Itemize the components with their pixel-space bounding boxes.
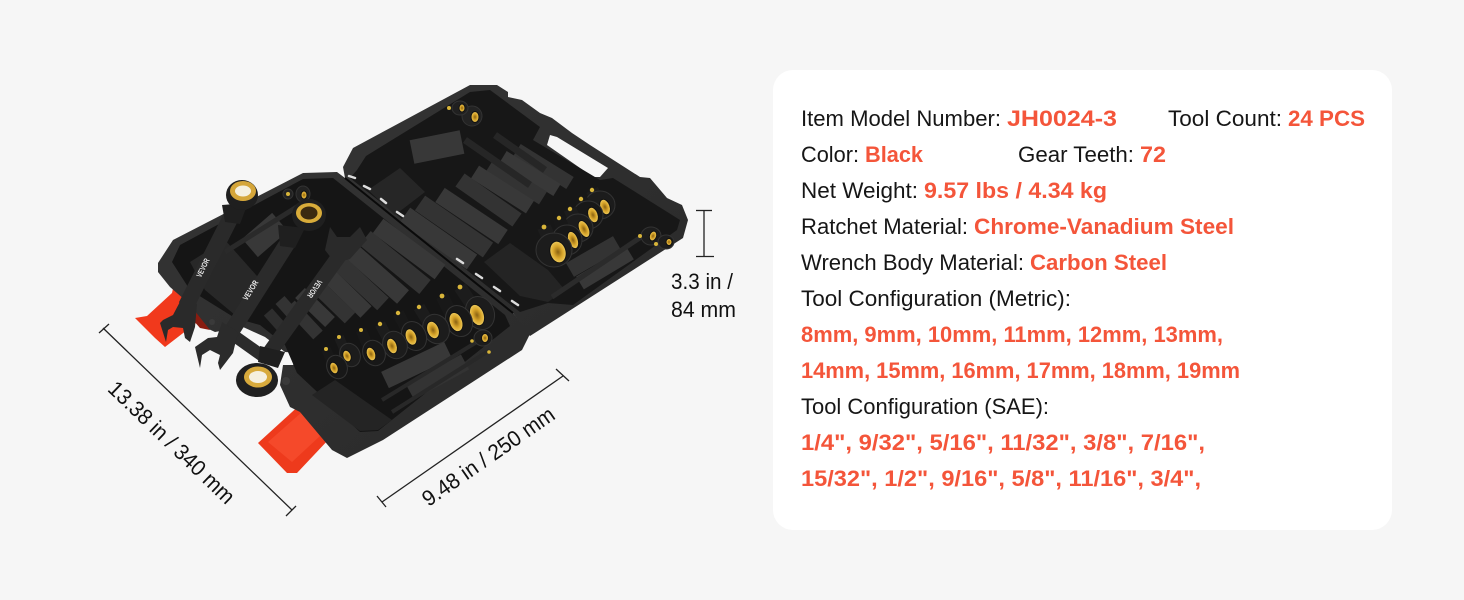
wrench two [195, 199, 326, 370]
net weight: Net Weight: [801, 178, 918, 203]
case lower half [158, 172, 530, 458]
upper compartment floor [484, 243, 565, 302]
color: Color: [801, 142, 859, 167]
SAE sizes [801, 430, 1205, 491]
lower wrench handles [225, 205, 490, 412]
wrench three [236, 227, 367, 397]
tool case product illustration [135, 85, 688, 473]
lower half cavity [172, 178, 510, 432]
net weight: 9.57 lbs / 4.34 kg [924, 178, 1107, 203]
upper half cavity [350, 90, 680, 312]
case upper half [343, 85, 688, 336]
metric sizes: 8mm, 9mm, 10mm, 11mm, 12mm, 13mm, [801, 322, 1223, 347]
red latch left [135, 280, 200, 347]
item model number [801, 106, 1117, 131]
tool count [1168, 106, 1365, 131]
hinge marks [349, 176, 518, 305]
specification text block [801, 106, 1365, 491]
wrench two: VEVOR [241, 278, 260, 302]
wrench body material [801, 250, 1167, 275]
color: Black [865, 142, 924, 167]
wrench body material: Wrench Body Material: [801, 250, 1024, 275]
metric heading: Tool Configuration (Metric): [801, 286, 1071, 311]
dimension: height: 84 mm [671, 297, 736, 322]
tool count: Tool Count: [1168, 106, 1282, 131]
item model number: Item Model Number: [801, 106, 1001, 131]
color [801, 142, 924, 167]
ratchet material: Chrome-Vanadium Steel [974, 214, 1234, 239]
dimension: width: 9.48 in / 250 mm [417, 402, 559, 511]
wrench one: VEVOR [195, 257, 212, 279]
lower ratchet heads [283, 186, 500, 382]
upper ratchet heads [447, 101, 674, 267]
SAE sizes: 15/32", 1/2", 9/16", 5/8", 11/16", 3/4", [801, 466, 1201, 491]
ratchet material [801, 214, 1234, 239]
gear teeth: 72 [1140, 142, 1166, 167]
lower compartment floor [312, 380, 392, 431]
SAE sizes: 1/4", 9/32", 5/16", 11/32", 3/8", 7/16", [801, 430, 1205, 455]
loose strip under wrench [233, 335, 264, 357]
latch hinge bumps [209, 319, 290, 385]
dark red latch recess [186, 305, 210, 330]
wrench three: VEVOR [305, 278, 324, 300]
dimension: length [99, 324, 296, 516]
SAE heading: Tool Configuration (SAE): [801, 394, 1049, 419]
wrench one [160, 180, 258, 342]
ratchet material: Ratchet Material: [801, 214, 968, 239]
red latch lower [258, 402, 330, 473]
hinge seam [345, 178, 513, 313]
metric sizes: 14mm, 15mm, 16mm, 17mm, 18mm, 19mm [801, 358, 1240, 383]
net weight [801, 178, 1107, 203]
dimension: length: 13.38 in / 340 mm [103, 376, 240, 509]
dimension: height: 3.3 in / [671, 269, 734, 294]
tool count: 24 PCS [1288, 106, 1365, 131]
metric sizes [801, 322, 1240, 383]
spec panel background [773, 70, 1392, 530]
upper wrench handles [405, 135, 647, 297]
dimension: height [671, 210, 736, 322]
dimension: width [377, 369, 569, 511]
item model number: JH0024-3 [1007, 106, 1117, 131]
wrench body material: Carbon Steel [1030, 250, 1167, 275]
gear teeth: Gear Teeth: [1018, 142, 1134, 167]
